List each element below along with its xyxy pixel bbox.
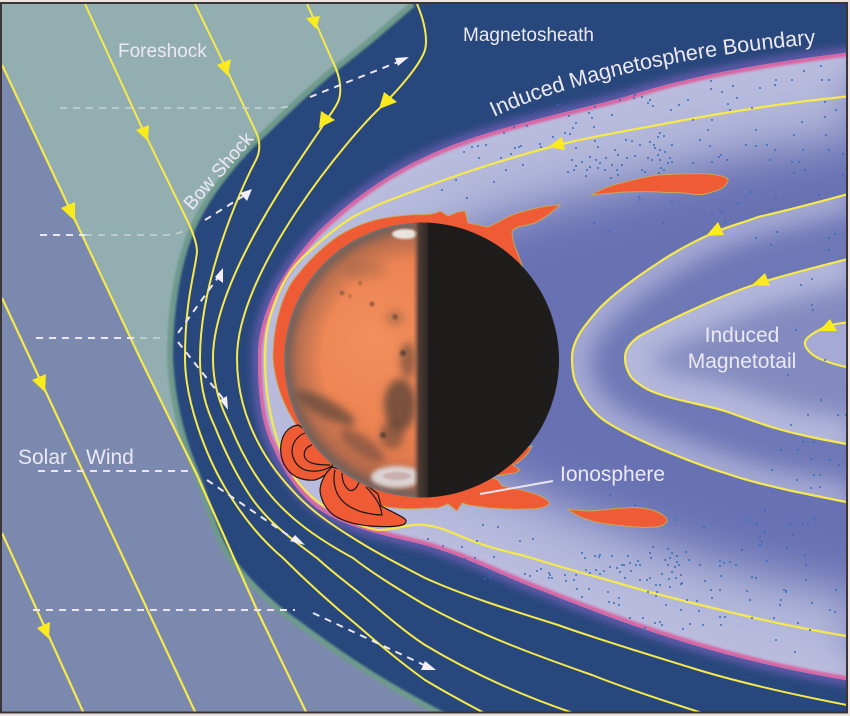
bow shock edge <box>170 4 445 716</box>
label: Bow Shock: Bow Shock <box>180 128 258 214</box>
streamline 4 <box>38 471 305 545</box>
magnetic lobes: crustal field <box>281 425 406 527</box>
polar cap north <box>392 229 418 239</box>
pink boundary layer <box>258 52 850 681</box>
surface markings <box>291 260 416 467</box>
magnetosphere field lines <box>265 96 850 637</box>
label: Ionosphere with leader <box>480 463 665 494</box>
panel: foreshock region <box>2 4 413 475</box>
panel: induced magnetosphere interior <box>250 40 850 690</box>
limb shading <box>284 222 559 498</box>
solar wind field lines <box>2 65 308 716</box>
label: Solar Wind: Solar <box>18 446 67 469</box>
terminator strip <box>413 220 430 500</box>
label: Solar Wind: Wind <box>86 446 134 469</box>
label: Induced Magnetosphere Boundary: Induced Magnetosphere Boundary <box>490 32 815 116</box>
tail plasma blob upper <box>591 174 728 195</box>
panel: magnetosheath <box>170 2 850 716</box>
streamline 5 <box>33 610 436 670</box>
panel: solar wind background <box>2 4 433 712</box>
dayside surface <box>280 220 563 500</box>
label: Magnetosheath: Magnetosheath <box>463 25 594 46</box>
boundary halo <box>258 52 850 681</box>
flow arrows: solar wind streamlines <box>33 57 436 670</box>
dayside crescent and nightside streamer <box>272 204 562 426</box>
nightside small patch <box>495 446 532 476</box>
ion scatter dots <box>442 66 850 330</box>
streamline 2 <box>40 189 252 235</box>
lobe two <box>320 467 406 527</box>
streamline 1 <box>60 57 409 108</box>
tail plasma blob lower <box>568 508 667 527</box>
nightside <box>428 220 563 500</box>
streamline 3 <box>36 268 228 410</box>
label: Induced Magnetotail: Induced <box>705 324 779 347</box>
label: Foreshock: Foreshock <box>118 41 207 62</box>
planet Mars <box>280 220 563 500</box>
induced magnetotail bands <box>573 196 846 501</box>
ion scatter dots lower tail <box>428 360 850 652</box>
polar cap south <box>371 466 423 488</box>
nightside lower streamer <box>370 478 550 512</box>
label: Ionosphere with leader: Ionosphere <box>560 463 665 486</box>
ionosphere: red plasma around Mars <box>273 174 728 527</box>
lobe one <box>281 425 333 480</box>
label: Induced Magnetotail: Magnetotail <box>688 350 796 373</box>
